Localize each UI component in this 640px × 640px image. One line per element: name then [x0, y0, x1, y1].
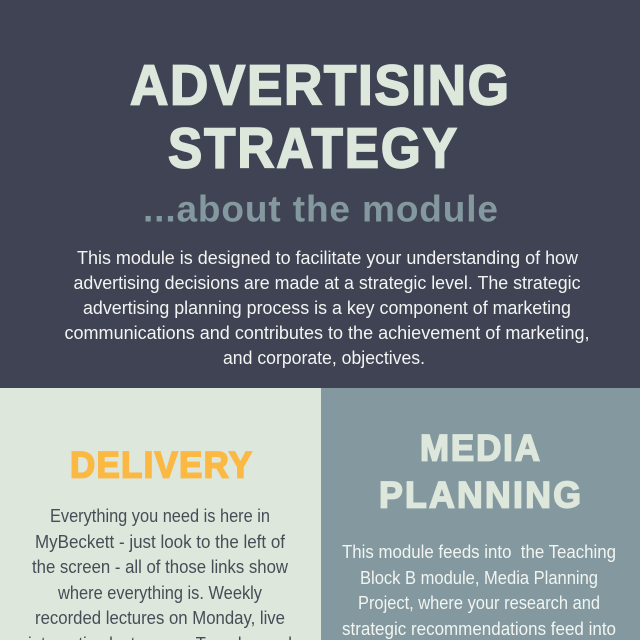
delivery text block [28, 506, 292, 640]
panel: media planning [321, 388, 640, 640]
intro text block: advertising decisions are made at a strategic level. The strategic [74, 273, 580, 293]
delivery heading: DELIVERY [70, 443, 252, 486]
media planning heading [379, 426, 581, 516]
intro text block: This module is designed to facilitate your understanding of how [77, 248, 579, 268]
subtitle: ...about the module [143, 188, 498, 230]
media planning text block: This module feeds into the Teaching [342, 542, 616, 562]
media planning text block: strategic recommendations feed into [342, 619, 616, 639]
title: ADVERTISING [130, 53, 509, 117]
intro text block: communications and contributes to the achievement of marketing, [64, 323, 590, 343]
media planning text block [342, 542, 616, 639]
intro text block [64, 248, 590, 368]
panel: header [0, 0, 640, 388]
title [130, 53, 509, 180]
title: STRATEGY [168, 117, 457, 180]
media planning text block: Project, where your research and [358, 593, 600, 613]
media planning heading: MEDIA [420, 426, 540, 469]
intro text block: advertising planning process is a key component of marketing [83, 298, 571, 318]
media planning text block: Block B module, Media Planning [360, 568, 598, 588]
delivery text block: the screen - all of those links show [32, 557, 289, 577]
delivery text block: where everything is. Weekly [57, 583, 262, 603]
delivery text block: recorded lectures on Monday, live [35, 608, 285, 628]
delivery text block: Everything you need is here in [50, 506, 270, 526]
intro text block: and corporate, objectives. [223, 348, 425, 368]
panel: delivery [0, 388, 321, 640]
media planning heading: PLANNING [379, 474, 581, 516]
delivery text block: MyBeckett - just look to the left of [35, 532, 286, 552]
